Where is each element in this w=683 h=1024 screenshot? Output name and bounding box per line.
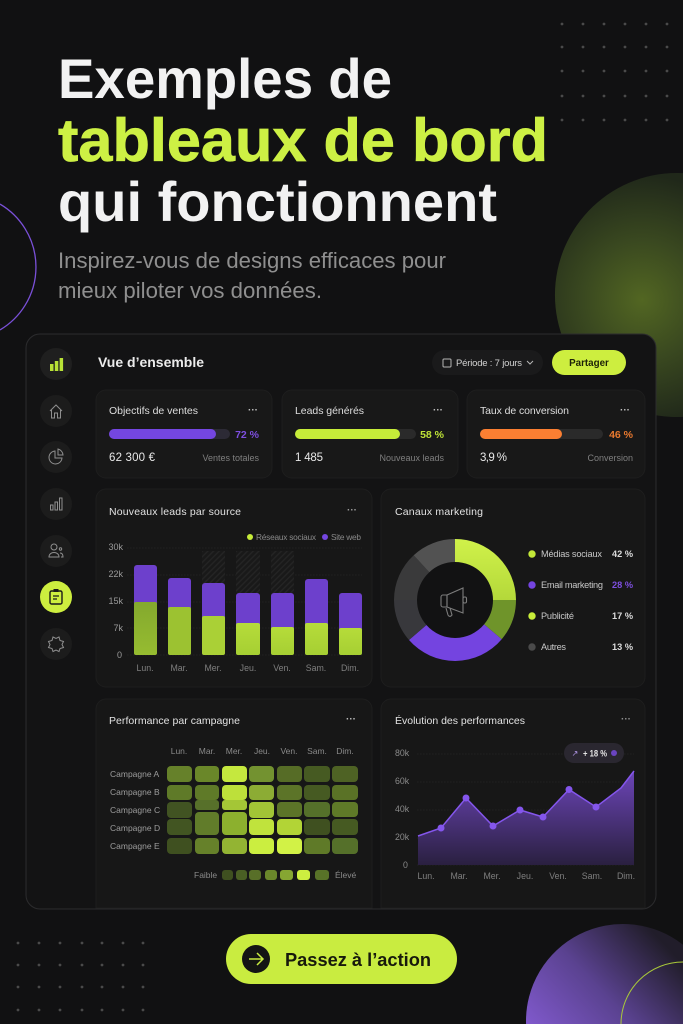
- dot grid: bottom left: [17, 942, 144, 1011]
- y axis: 80k: [395, 748, 410, 758]
- decorative green circle: [555, 173, 683, 417]
- heatmap column labels: Lun.: [171, 746, 187, 756]
- legend: Autres: [541, 642, 566, 652]
- donut chart: [394, 539, 516, 661]
- card: taux de conversion: ···: [620, 405, 630, 416]
- card: leads générés: [282, 390, 458, 478]
- share button: Partager: [569, 358, 609, 369]
- x axis: Lun.: [136, 663, 154, 673]
- legend: 28 %: [612, 580, 633, 590]
- heatmap column labels: Dim.: [336, 746, 354, 756]
- x axis: Ven.: [273, 663, 291, 673]
- area chart: [418, 771, 634, 865]
- icon: arrow: [242, 945, 270, 973]
- legend: 13 %: [612, 642, 633, 652]
- panel: performance par campagne: Performance par campagne: [109, 715, 240, 727]
- heatmap column labels: Jeu.: [254, 746, 270, 756]
- callout: +18 %: ↗: [572, 749, 578, 758]
- title: Exemples de: [58, 47, 392, 110]
- card: objectifs de ventes: Ventes totales: [202, 453, 259, 463]
- y axis: 30k: [108, 542, 123, 552]
- x axis: [136, 663, 359, 673]
- x axis: Sam.: [582, 871, 602, 881]
- heatmap row labels: Campagne B: [110, 787, 160, 797]
- panel: nouveaux leads par source: Nouveaux leads par source: [109, 506, 241, 518]
- heatmap legend: Élevé: [335, 870, 357, 880]
- card: objectifs de ventes: 72 %: [235, 429, 260, 441]
- title: [58, 47, 548, 233]
- decorative purple circle: [526, 924, 683, 1024]
- icon: home: [40, 395, 72, 427]
- y axis: 0: [117, 650, 122, 660]
- title: qui fonctionnent: [58, 170, 497, 233]
- icon: logo bars: [40, 348, 72, 380]
- y axis: 40k: [395, 804, 410, 814]
- y axis: 0: [403, 860, 408, 870]
- icon: pie chart: [40, 441, 72, 473]
- x axis: Lun.: [417, 871, 435, 881]
- card: objectifs de ventes: Objectifs de ventes: [109, 405, 198, 417]
- heatmap column labels: Ven.: [280, 746, 298, 756]
- panel: performance par campagne: [96, 699, 372, 908]
- icon: clipboard active: [40, 581, 72, 613]
- card: taux de conversion: 3,9 %: [480, 452, 507, 464]
- title: tableaux de bord: [58, 107, 548, 174]
- legend: Site web: [331, 532, 361, 542]
- card: taux de conversion: [467, 390, 645, 478]
- icon: megaphone: [441, 588, 466, 616]
- callout: +18 %: + 18 %: [583, 748, 607, 758]
- y axis: 60k: [395, 776, 410, 786]
- share button: [552, 350, 626, 375]
- panel: canaux marketing: [381, 489, 645, 687]
- y axis: [395, 748, 410, 870]
- heatmap column labels: Mar.: [199, 746, 215, 756]
- heading: vue d'ensemble: Vue d’ensemble: [98, 354, 204, 370]
- x axis: Mar.: [450, 871, 468, 881]
- heatmap column labels: Mer.: [226, 746, 242, 756]
- x axis: Mar.: [170, 663, 188, 673]
- x axis: Dim.: [617, 871, 635, 881]
- subtitle: mieux piloter vos données.: [58, 278, 322, 303]
- x axis: Sam.: [306, 663, 326, 673]
- decorative lime ring: [621, 962, 683, 1024]
- stacked bars: [134, 565, 362, 655]
- hatched ghost bars: [202, 551, 294, 601]
- x axis: Dim.: [341, 663, 359, 673]
- x axis: [417, 871, 635, 881]
- y axis: 15k: [108, 596, 123, 606]
- legend: 17 %: [612, 611, 633, 621]
- subtitle: Inspirez-vous de designs efficaces pour: [58, 248, 446, 273]
- dashboard panel: [26, 334, 656, 909]
- panel: évolution des performances: [381, 699, 645, 908]
- call to action button: Passez à l’action: [285, 949, 431, 970]
- heatmap row labels: Campagne D: [110, 823, 160, 833]
- period selector: Période : 7 jours: [456, 358, 522, 369]
- card: leads générés: 1 485: [295, 452, 323, 464]
- legend: Réseaux sociaux: [256, 532, 317, 542]
- heatmap legend: [194, 870, 357, 880]
- panel: nouveaux leads par source: ···: [347, 505, 357, 516]
- heatmap cells: [167, 766, 358, 854]
- heatmap legend: Faible: [194, 870, 217, 880]
- legend: 42 %: [612, 549, 633, 559]
- legend: Médias sociaux: [541, 549, 602, 559]
- card: leads générés: Nouveaux leads: [379, 453, 444, 463]
- card: leads générés: 58 %: [420, 429, 445, 441]
- x axis: Mer.: [204, 663, 222, 673]
- subtitle: [58, 248, 446, 303]
- y axis: [108, 542, 123, 660]
- card: objectifs de ventes: 62 300 €: [109, 452, 156, 464]
- icon: users: [40, 535, 72, 567]
- heatmap column labels: [171, 746, 354, 756]
- card: taux de conversion: 46 %: [609, 429, 634, 441]
- callout: +18 %: [564, 743, 624, 763]
- icon: bar chart: [40, 488, 72, 520]
- heatmap row labels: [110, 769, 160, 851]
- panel: évolution des performances: ···: [621, 714, 631, 725]
- y axis: 20k: [395, 832, 410, 842]
- heatmap row labels: Campagne A: [110, 769, 159, 779]
- legend: [528, 549, 633, 652]
- card: taux de conversion: Taux de conversion: [480, 405, 569, 417]
- panel: nouveaux leads par source: [96, 489, 372, 687]
- x axis: Jeu.: [517, 871, 533, 881]
- icon: settings puzzle: [40, 628, 72, 660]
- panel: évolution des performances: Évolution des performances: [395, 714, 525, 727]
- card: taux de conversion: Conversion: [587, 453, 633, 463]
- heatmap row labels: Campagne C: [110, 805, 160, 815]
- heatmap row labels: Campagne E: [110, 841, 160, 851]
- call to action button: [226, 934, 457, 984]
- panel: canaux marketing: Canaux marketing: [395, 506, 483, 518]
- x axis: Mer.: [483, 871, 501, 881]
- legend: [247, 532, 361, 542]
- sidebar: [40, 348, 72, 660]
- card: objectifs de ventes: [96, 390, 272, 478]
- x axis: Jeu.: [240, 663, 256, 673]
- card: objectifs de ventes: ···: [248, 405, 258, 416]
- period selector: [432, 350, 543, 375]
- panel: performance par campagne: ···: [346, 714, 356, 725]
- card: leads générés: Leads générés: [295, 405, 364, 417]
- x axis: Ven.: [549, 871, 567, 881]
- dot grid: top right: [561, 23, 668, 121]
- y axis: 7k: [113, 623, 123, 633]
- heatmap column labels: Sam.: [307, 746, 327, 756]
- legend: Email marketing: [541, 580, 603, 590]
- card: leads générés: ···: [433, 405, 443, 416]
- legend: Publicité: [541, 611, 574, 621]
- decorative purple ring: [0, 204, 36, 330]
- y axis: 22k: [108, 569, 123, 579]
